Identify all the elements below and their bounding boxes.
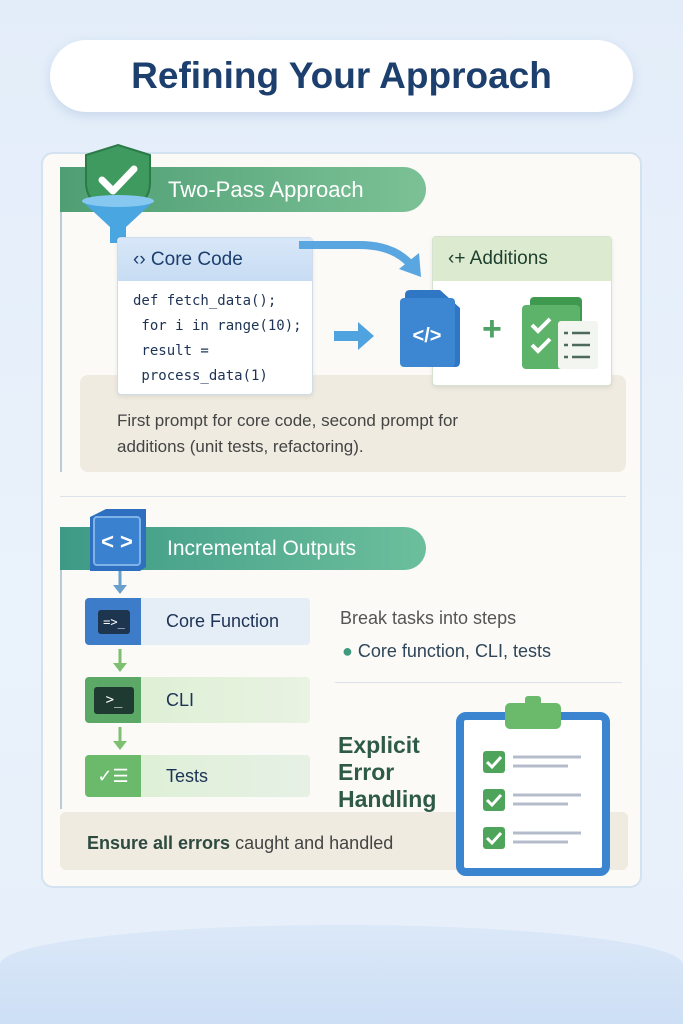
heading ribbon: Incremental Outputs	[60, 527, 426, 570]
divider small	[335, 682, 622, 683]
additions header	[433, 237, 611, 281]
step: CLI: CLI	[166, 690, 194, 710]
text: ensure errors: Ensure all errors caught and handled	[87, 833, 393, 853]
description text: additions (unit tests, refactoring).	[117, 437, 364, 456]
step: core function: Core Function	[166, 611, 279, 631]
icon: checklist document	[522, 297, 598, 369]
additions box	[432, 236, 612, 386]
code text: process_data(1)	[141, 368, 268, 384]
left line	[60, 212, 62, 472]
background wave	[0, 925, 683, 1024]
icon: code cube: < >	[101, 529, 133, 554]
code text: result =	[141, 343, 209, 359]
text: explicit error handling: Handling	[338, 786, 436, 812]
heading ribbon: Two-Pass Approach: Two-Pass Approach	[168, 177, 364, 202]
step: CLI	[85, 677, 310, 723]
bullet text: ● Core function, CLI, tests	[342, 641, 551, 661]
text: explicit error handling	[338, 732, 436, 812]
step: tests: ✓☰	[97, 766, 129, 786]
divider	[60, 496, 626, 497]
step: tests: Tests	[166, 766, 208, 786]
code text	[133, 293, 302, 384]
icon: code document: </>	[413, 325, 441, 347]
step: tests	[85, 755, 310, 797]
code text: for i in range(10);	[141, 318, 302, 334]
step: core function: =>_	[103, 615, 125, 629]
main card	[41, 152, 642, 888]
panel: two-pass approach	[60, 144, 626, 472]
core code header	[118, 238, 312, 281]
step: CLI: >_	[106, 692, 122, 708]
arrow: right	[334, 322, 374, 350]
icon: clipboard	[456, 696, 610, 876]
heading ribbon: Incremental Outputs: Incremental Outputs	[167, 537, 356, 560]
additions header: ‹+ Additions	[448, 248, 548, 269]
arrow: curved	[299, 241, 421, 277]
title: Refining Your Approach	[131, 55, 552, 96]
text: explicit error handling: Error	[338, 759, 394, 785]
beige band	[80, 375, 626, 472]
icon: code document	[400, 290, 460, 367]
bottom beige band	[60, 812, 628, 870]
panel: incremental outputs	[60, 509, 628, 876]
icon: shield and funnel	[82, 144, 154, 243]
icon: code cube	[90, 509, 146, 571]
left line	[60, 569, 62, 809]
code text: def fetch_data();	[133, 293, 276, 309]
arrows: flow	[113, 571, 127, 750]
step: core function	[85, 598, 310, 645]
text: break tasks: Break tasks into steps	[340, 608, 516, 628]
description text: First prompt for core code, second prompt for	[117, 411, 458, 430]
core code header: ‹› Core Code	[133, 249, 243, 270]
core code box	[117, 237, 313, 395]
title	[50, 40, 633, 112]
icon: plus: +	[482, 310, 502, 348]
description text	[117, 411, 458, 456]
text: explicit error handling: Explicit	[338, 732, 420, 758]
heading ribbon: Two-Pass Approach	[60, 167, 426, 212]
